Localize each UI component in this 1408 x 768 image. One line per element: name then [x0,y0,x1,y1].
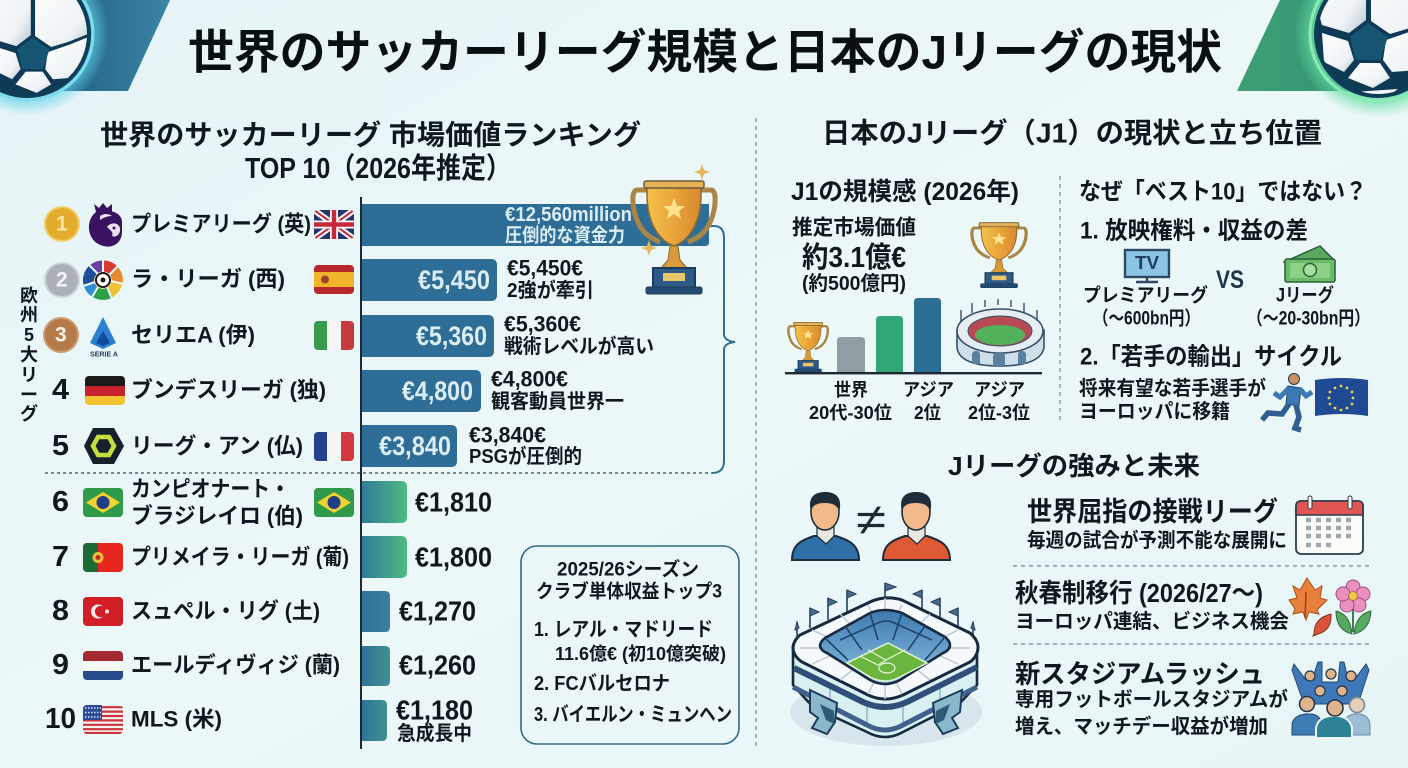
row 1: Premier League [45,203,354,247]
row 4: Bundesliga: 4 [52,374,69,406]
reason 1: broadcast revenue gap: プレミアリーグ [1083,284,1208,306]
bar 1: Premier League: 圧倒的な資金力 [505,224,625,246]
reason 1: broadcast revenue gap: 1. 放映権料・収益の差 [1080,218,1308,244]
vertical label: European big five [20,286,38,424]
icon: Ligue 1 logo [84,428,124,464]
bar 8: Super Lig [362,591,476,632]
bar 3: Serie A: 戦術レベルが高い [504,334,654,358]
row 9: Eredivisie: 9 [52,649,69,681]
chart labels: 世界 [834,380,868,400]
row 8: Super Lig: 8 [52,595,69,627]
panel heading: なぜ「ベスト10」ではない？ [1079,178,1367,206]
ranking bar chart [360,197,709,749]
title: 世界のサッカーリーグ規模と日本のJリーグの現状 [188,26,1222,78]
row 2: La Liga [45,259,354,299]
row 7: Primeira Liga: 7 [52,541,69,573]
bar 1: Premier League: €12,560million [505,204,632,226]
row 10: MLS: 10 [45,703,76,735]
callout: top three club revenue 2025/26 [521,546,739,744]
callout: top three club revenue 2025/26: 2025/26シーズン [557,558,699,580]
reason 1: broadcast revenue gap: Jリーグ [1276,284,1334,306]
bar 4: Bundesliga: 観客動員世界一 [491,390,624,413]
right section heading: 日本のJリーグ（J1）の現状と立ち位置 [822,116,1322,148]
row 3: Serie A: 3 [55,324,67,346]
row 2: La Liga: 2 [56,268,68,292]
vertical label: European big five: グ [20,403,38,424]
left section heading [100,118,641,185]
bar 3: Serie A: €5,360 [416,321,487,351]
left corner banner with soccer ball [0,0,170,124]
vertical label: European big five: ー [20,385,38,405]
row 8: Super Lig [53,597,319,626]
icon: La Liga logo [83,259,124,299]
row 2: La Liga: ラ・リーガ (西) [131,266,285,292]
reason 1: broadcast revenue gap: VS [1216,266,1244,294]
row 5: Ligue 1: 5 [52,430,69,462]
bar 6: Brasileirao: €1,810 [415,486,492,518]
estimated market value: 約3.1億€ [802,241,906,274]
icon: small stadium [957,299,1044,366]
reason 1: broadcast revenue gap: （〜20-30bn円） [1247,308,1370,330]
bar 3: Serie A [362,312,654,358]
row 7: Primeira Liga [52,541,349,573]
vertical label: European big five: 大 [20,345,38,365]
bar 5: Ligue 1: €3,840 [379,431,451,461]
row 6: Brasileirao [52,476,354,528]
vertical label: European big five: 5 [24,325,34,345]
bar chart: J1 rank [785,298,1042,374]
point: new stadium rush: 専用フットボールスタジアムが [1015,687,1288,711]
panel: why not top 10 [1079,178,1370,430]
icon: runner [1262,374,1312,430]
icon: autumn leaves [1289,578,1331,636]
estimated market value: 推定市場価値 [792,216,916,240]
bar 7: Primeira Liga [362,536,492,578]
callout: top three club revenue 2025/26: 3. バイエルン・ミュンヘン [534,703,732,726]
chart labels: アジア [903,380,954,400]
reason 1: broadcast revenue gap [1080,218,1370,330]
icon: cheering fans [1292,662,1370,738]
row 6: Brasileirao: 6 [52,486,69,518]
point: new stadium rush [1015,659,1370,738]
row 10: MLS [46,705,221,734]
reason 1: broadcast revenue gap: （〜600bn円） [1093,308,1200,330]
chart labels: アジア [974,380,1025,400]
bar 4: Bundesliga: €4,800 [402,376,473,406]
bar 4: Bundesliga [362,366,624,413]
point: new stadium rush: 増え、マッチデー収益が増加 [1015,714,1268,738]
row 9: Eredivisie [53,651,339,680]
bar 2: La Liga: €5,450€ [507,256,583,280]
bar 5: Ligue 1: €3,840€ [469,422,546,448]
section heading: strengths and future: Jリーグの強みと未来 [948,451,1200,481]
row 3: Serie A [44,317,354,358]
bar 1: Premier League [362,204,709,246]
point: competitive league [1027,496,1363,554]
row 3: Serie A: セリエA (伊) [131,322,255,348]
icon: Serie A logo: SERIE A [90,352,118,358]
vertical label: European big five: リ [20,365,38,385]
panel heading: J1の規模感 (2026年) [791,178,1019,206]
icon: calendar [1296,496,1363,554]
bar 10: MLS: €1,180 [396,694,473,726]
bar 2: La Liga [362,256,594,302]
point: autumn-spring season shift [1015,578,1371,636]
league rows [44,203,354,735]
icon: trophy [972,223,1026,288]
row 10: MLS: MLS (米) [131,706,222,732]
chart labels: 2位 [914,403,941,423]
bar 5: Ligue 1: PSGが圧倒的 [469,444,582,468]
row 4: Bundesliga [52,374,326,406]
bar 2: La Liga: €5,450 [418,265,490,295]
reason 2: young player export: 将来有望な若手選手が [1079,376,1266,400]
bar 3: Serie A: €5,360€ [504,312,581,336]
row 1: Premier League: 1 [56,212,68,236]
vertical label: European big five: 欧 [20,286,38,306]
row 8: Super Lig: スュペル・リグ (土) [131,598,320,624]
bar 6: Brasileirao [362,481,492,523]
row 4: Bundesliga: ブンデスリーガ (独) [131,378,326,402]
panel: J1 scale [785,178,1044,423]
point: autumn-spring season shift: ヨーロッパ連結、ビジネス機会 [1015,609,1289,633]
point: new stadium rush: 新スタジアムラッシュ [1015,659,1265,689]
bar 9: Eredivisie [362,646,476,686]
bar 2: La Liga: 2強が牽引 [507,278,594,302]
chart axis [360,197,362,749]
estimated market value [792,216,916,295]
bar 5: Ligue 1 [362,422,582,468]
icon: Serie A logo [90,317,118,358]
row 5: Ligue 1 [52,428,354,464]
chart labels: 2位-3位 [968,403,1030,423]
reason 2: young player export: 2.「若手の輸出」サイクル [1080,344,1342,370]
icon: large stadium [790,583,982,746]
callout: top three club revenue 2025/26: 1. レアル・マドリード [534,619,713,641]
chart labels [809,380,1030,423]
icon: EU flag [1315,378,1368,416]
point: competitive league: 世界屈指の接戦リーグ [1027,496,1278,527]
chart labels: 20代-30位 [809,403,892,423]
icon: banknotes [1284,246,1335,282]
icon: spring flower [1336,580,1371,634]
icon: TV [1125,250,1169,282]
vertical label: European big five: 州 [20,305,38,325]
row 9: Eredivisie: エールディヴィジ (蘭) [131,652,340,678]
icon: two players not equal: ≠ [856,496,886,544]
reason 2: young player export: ヨーロッパに移籍 [1079,400,1230,423]
bar 10: MLS [362,694,473,745]
bar 9: Eredivisie: €1,260 [399,650,476,680]
bar 7: Primeira Liga: €1,800 [415,542,492,572]
point: autumn-spring season shift: 秋春制移行 (2026/27〜) [1015,578,1263,608]
callout: top three club revenue 2025/26: クラブ単体収益トップ3 [536,580,722,602]
bar 4: Bundesliga: €4,800€ [491,366,568,392]
bracket for top five leagues [710,226,735,473]
row 5: Ligue 1: リーグ・アン (仏) [131,434,303,458]
icon: Premier League lion [89,203,122,247]
left section heading: TOP 10（2026年推定） [245,152,511,185]
reason 2: young player export [1079,344,1368,430]
callout: top three club revenue 2025/26: 2. FCバルセロナ [534,672,670,695]
row 6: Brasileirao: ブラジレイロ (伯) [131,504,303,528]
icon: large trophy [633,164,715,294]
bar 8: Super Lig: €1,270 [399,596,476,626]
callout: top three club revenue 2025/26: 11.6億€ (初10億突破) [555,644,726,664]
row 7: Primeira Liga: プリメイラ・リーガ (葡) [131,544,349,570]
right corner banner with soccer ball [1237,0,1408,124]
estimated market value: (約500億円) [802,272,906,295]
row 6: Brasileirao: カンピオナート・ [131,476,290,502]
left section heading: 世界のサッカーリーグ 市場価値ランキング [100,118,641,150]
bar 10: MLS: 急成長中 [397,721,472,745]
icon: TV: TV [1135,253,1159,273]
point: competitive league: 毎週の試合が予測不能な展開に [1027,528,1287,552]
icon: two players not equal [792,492,950,560]
row 1: Premier League: プレミアリーグ (英) [131,212,311,236]
